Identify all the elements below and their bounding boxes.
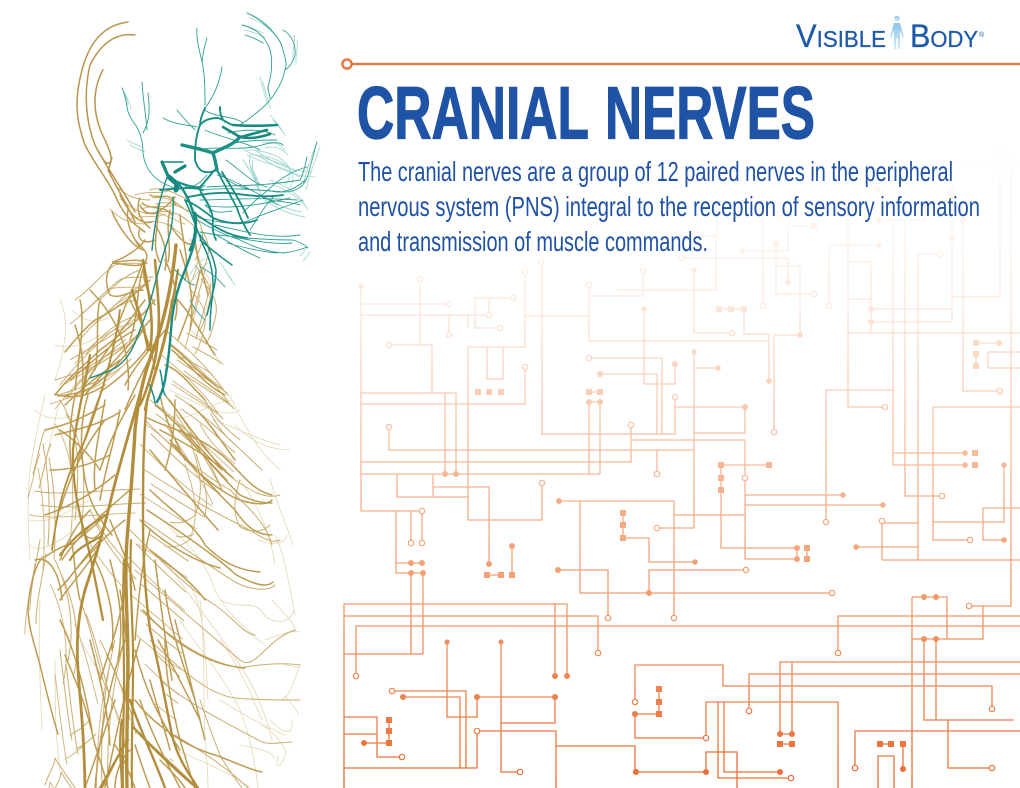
rule line	[352, 63, 1020, 65]
pale teal facial nerve branches	[122, 13, 320, 285]
logo: Visible Body	[796, 16, 985, 54]
title: NERVES	[605, 72, 815, 154]
square circuit nodes	[386, 190, 979, 747]
intro paragraph: and transmission of muscle commands.	[358, 226, 708, 257]
pale peripheral gold nerves	[28, 262, 300, 788]
filled circuit nodes	[358, 186, 1007, 775]
rule ring	[342, 59, 352, 69]
nerve illustration: spinal and peripheral nerves with cranial nerves	[25, 13, 320, 788]
logo: Visible Body: ®	[979, 31, 985, 39]
scalp gold nerves	[77, 22, 145, 232]
open circuit nodes	[353, 215, 1003, 781]
title: CRANIAL	[357, 72, 589, 154]
thin gold nerves	[25, 185, 306, 788]
neck and upper torso nerve web	[35, 195, 272, 788]
intro paragraph	[358, 156, 980, 257]
logo: Visible Body: VISIBLE	[796, 18, 886, 54]
icon: human figure	[890, 16, 904, 49]
header rule	[342, 59, 1020, 69]
circuit network background	[344, 145, 1020, 788]
circuit traces	[344, 145, 1020, 788]
teal cranial nerve branches	[122, 13, 317, 320]
thick gold nerve trunks	[52, 245, 198, 788]
logo: Visible Body: BODY	[910, 18, 978, 54]
medium gold nerves	[28, 195, 273, 788]
main teal cranial nerve trunks	[90, 107, 283, 403]
